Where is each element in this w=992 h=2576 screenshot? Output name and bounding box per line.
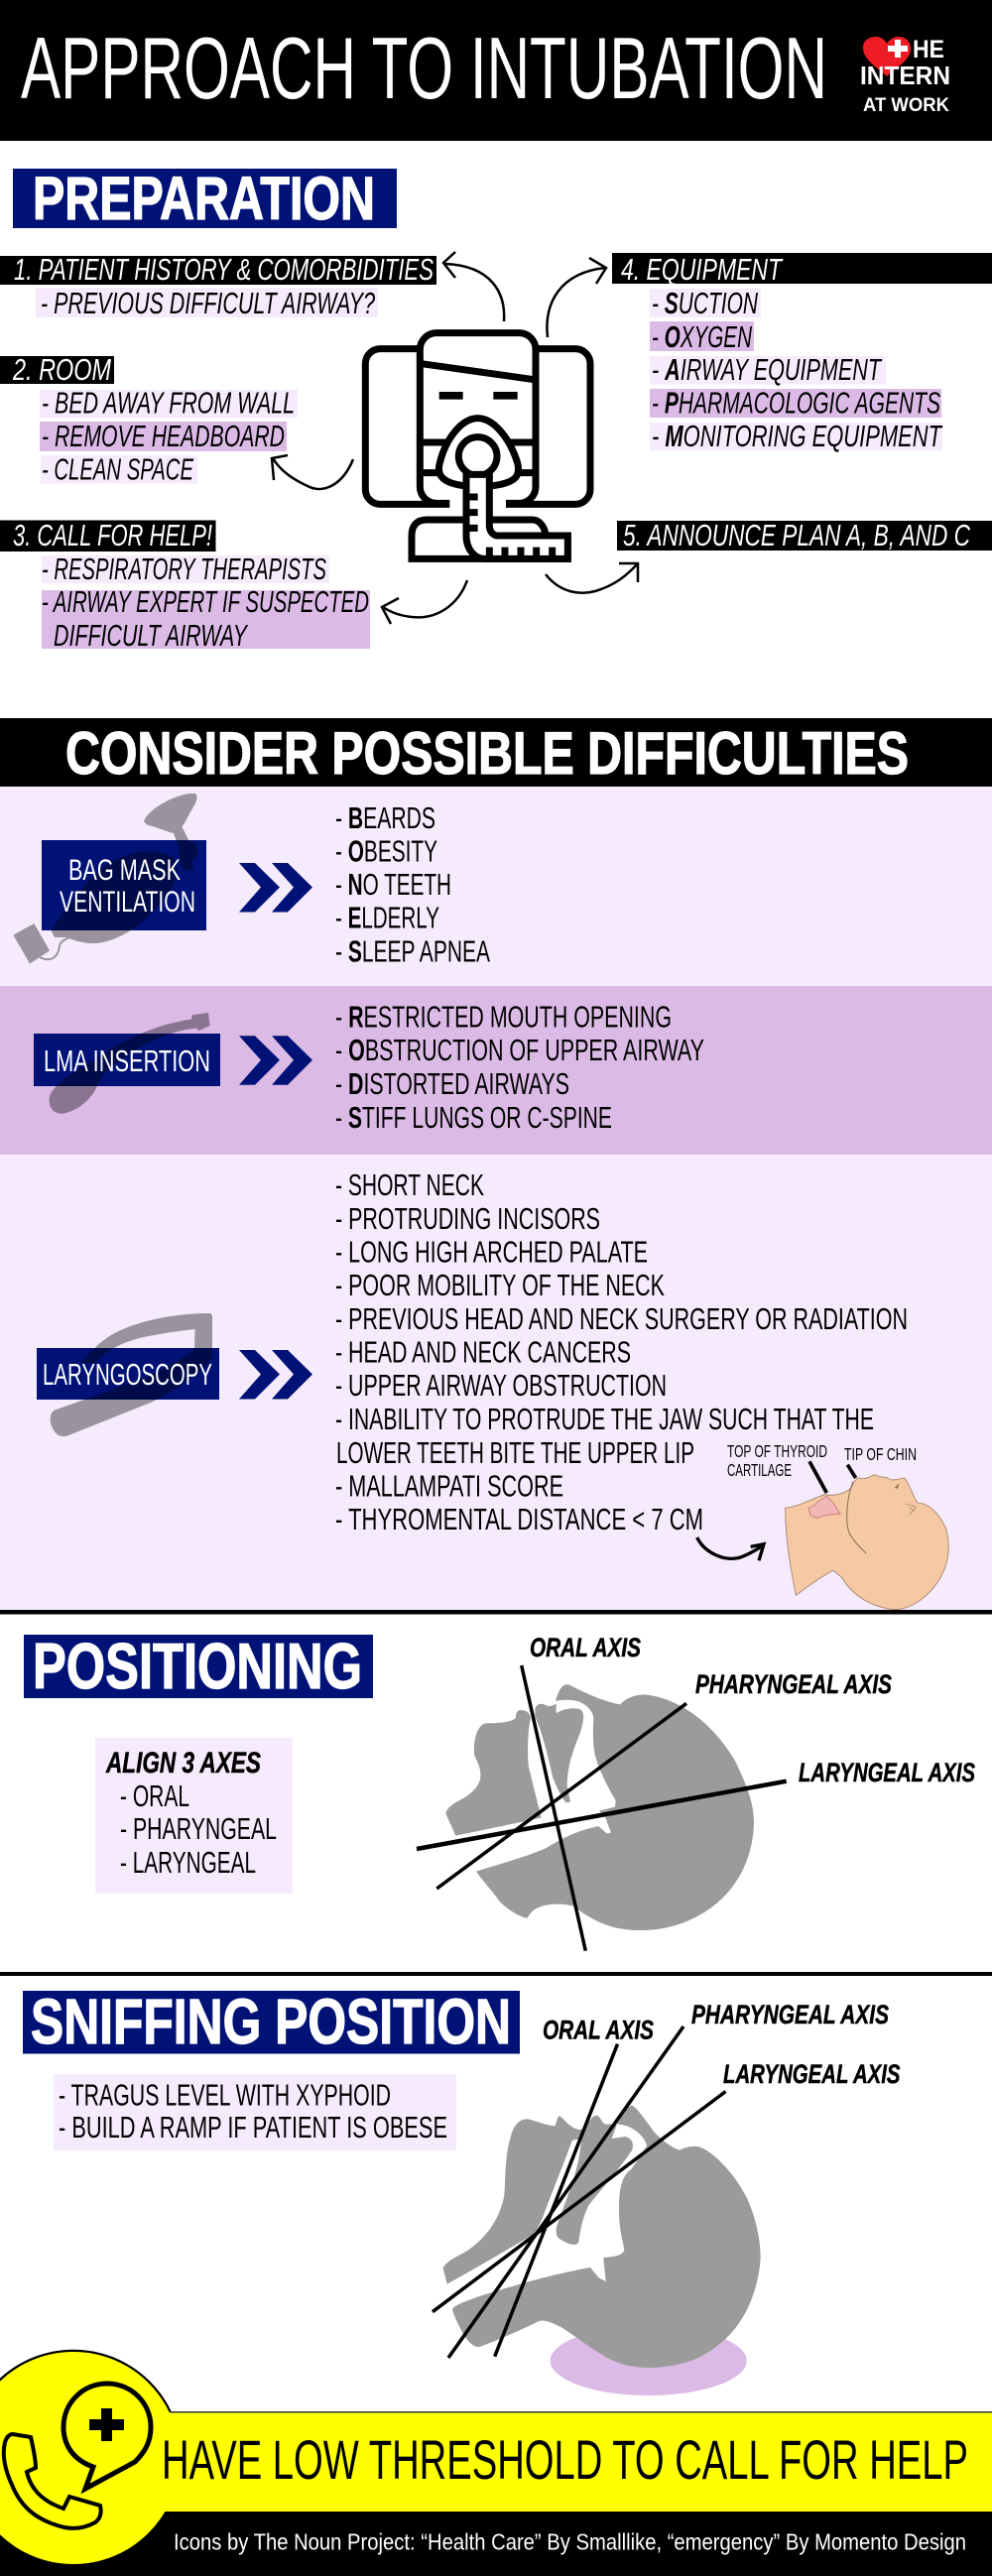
illustration: thyromental distance head xyxy=(697,1461,948,1610)
label: bag mask ventilation: VENTILATION xyxy=(60,886,195,919)
list: laryngoscopy difficulties: - THYROMENTAL DISTANCE < 7 CM xyxy=(335,1502,703,1536)
text block: sniffing position tips: - TRAGUS LEVEL WITH XYPHOID xyxy=(59,2077,391,2113)
list: laryngoscopy difficulties: - SHORT NECK xyxy=(335,1167,484,1202)
icon: laryngoscope xyxy=(51,1313,212,1436)
label: laryngoscopy: LARYNGOSCOPY xyxy=(43,1357,212,1392)
text block: align 3 axes xyxy=(95,1738,293,1894)
list: laryngoscopy difficulties: - POOR MOBILITY OF THE NECK xyxy=(335,1268,665,1302)
diagram: neutral head with axes xyxy=(417,1633,975,1951)
divider xyxy=(0,1610,992,1615)
step 4: equipment xyxy=(612,252,992,453)
panel: LMA insertion xyxy=(0,986,992,1155)
list: laryngoscopy difficulties: - LONG HIGH ARCHED PALATE xyxy=(335,1234,648,1270)
labels: thyromental landmarks: TIP OF CHIN xyxy=(844,1444,917,1464)
icon: patient with oxygen mask xyxy=(365,333,590,558)
step 1: patient history xyxy=(0,252,436,320)
heading: positioning: POSITIONING xyxy=(33,1630,362,1702)
list: laryngoscopy difficulties: - PROTRUDING INCISORS xyxy=(335,1201,600,1236)
labels: thyromental landmarks xyxy=(727,1441,917,1480)
arrow: to step 1 xyxy=(443,252,504,321)
step 3: call for help: 3. CALL FOR HELP! xyxy=(13,518,212,552)
step 2: room: - BED AWAY FROM WALL xyxy=(42,385,295,421)
step 1: patient history: 1. PATIENT HISTORY & COMORBIDITIES xyxy=(14,252,434,287)
list: laryngoscopy difficulties xyxy=(335,1167,908,1536)
divider xyxy=(0,1972,992,1976)
text block: align 3 axes: ALIGN 3 AXES xyxy=(105,1747,261,1779)
axis labels xyxy=(543,2000,901,2089)
heading: preparation: PREPARATION xyxy=(33,165,375,232)
step 3: call for help: - RESPIRATORY THERAPISTS xyxy=(42,552,326,586)
list: ROD S: - OBSTRUCTION OF UPPER AIRWAY xyxy=(335,1033,704,1067)
text block: align 3 axes: - ORAL xyxy=(120,1779,189,1813)
list: ROD S: - RESTRICTED MOUTH OPENING xyxy=(335,1000,672,1035)
axis labels: PHARYNGEAL AXIS xyxy=(691,2000,889,2029)
axis labels xyxy=(530,1633,975,1787)
axis labels: ORAL AXIS xyxy=(530,1633,641,1662)
head ramp and silhouette xyxy=(443,2106,761,2395)
list: BONES: - ELDERLY xyxy=(335,901,439,934)
text block: align 3 axes: - LARYNGEAL xyxy=(120,1845,256,1880)
label: LMA insertion: LMA INSERTION xyxy=(44,1043,210,1078)
labels: thyromental landmarks: TOP OF THYROID xyxy=(727,1441,827,1461)
step 4: equipment: 4. EQUIPMENT xyxy=(621,252,784,287)
axis labels: ORAL AXIS xyxy=(543,2016,654,2045)
axis lines xyxy=(417,1665,787,1951)
axis labels: PHARYNGEAL AXIS xyxy=(695,1669,892,1699)
diagram: sniffing head with axes xyxy=(433,2000,901,2395)
list: BONES: - BEARDS xyxy=(335,800,435,835)
logo: The Intern at Work: HE xyxy=(913,36,944,63)
icon: speech bubble with plus xyxy=(63,2384,151,2489)
step 4: equipment: - AIRWAY EQUIPMENT xyxy=(652,352,882,387)
list: ROD S: - DISTORTED AIRWAYS xyxy=(335,1066,569,1101)
heading: sniffing position: SNIFFING POSITION xyxy=(31,1986,511,2057)
label: bag mask ventilation xyxy=(60,854,195,919)
panel: laryngoscopy xyxy=(0,1155,992,1610)
step 4: equipment: - OXYGEN xyxy=(652,319,752,354)
icon: double chevron xyxy=(239,1036,312,1085)
list: BONES: - SLEEP APNEA xyxy=(335,933,490,968)
icon: telephone handset xyxy=(4,2434,101,2528)
text block: sniffing position tips: - BUILD A RAMP IF PATIENT IS OBESE xyxy=(59,2110,447,2145)
list: laryngoscopy difficulties: LOWER TEETH BITE THE UPPER LIP xyxy=(336,1435,694,1470)
arrow: to step 4 xyxy=(547,258,606,337)
arrow: to step 2 xyxy=(272,455,353,489)
axis labels: LARYNGEAL AXIS xyxy=(723,2059,901,2089)
icon: laryngeal mask airway xyxy=(50,1013,210,1114)
step 2: room: 2. ROOM xyxy=(12,352,111,387)
step 2: room: - REMOVE HEADBOARD xyxy=(42,419,285,453)
footer callout xyxy=(0,2351,992,2576)
list: BONES xyxy=(335,800,490,968)
labels: thyromental landmarks: CARTILAGE xyxy=(727,1460,792,1480)
list: ROD S: - STIFF LUNGS OR C-SPINE xyxy=(335,1100,612,1135)
logo: The Intern at Work: INTERN xyxy=(860,61,950,90)
list: laryngoscopy difficulties: - HEAD AND NECK CANCERS xyxy=(335,1335,631,1369)
step 1: patient history: - PREVIOUS DIFFICULT AIRWAY? xyxy=(41,286,376,320)
icon: double chevron xyxy=(239,863,312,913)
head silhouette xyxy=(445,1684,754,1930)
axis lines xyxy=(433,2026,726,2358)
list: laryngoscopy difficulties: - MALLAMPATI SCORE xyxy=(335,1468,563,1504)
step 4: equipment: - SUCTION xyxy=(652,286,758,320)
header banner xyxy=(0,0,992,141)
panel: bag mask ventilation xyxy=(0,787,992,986)
text block: align 3 axes: - PHARYNGEAL xyxy=(120,1811,277,1846)
arrow: to step 5 xyxy=(546,563,638,593)
step 2: room xyxy=(0,352,298,486)
text block: sniffing position tips xyxy=(54,2074,456,2150)
icon: bag valve mask xyxy=(13,794,198,964)
logo: The Intern at Work xyxy=(860,36,950,116)
label: bag mask ventilation: BAG MASK xyxy=(68,854,181,887)
list: laryngoscopy difficulties: - UPPER AIRWAY OBSTRUCTION xyxy=(335,1368,667,1403)
list: ROD S xyxy=(335,1000,704,1135)
step 3: call for help: - AIRWAY EXPERT IF SUSPECTED xyxy=(42,584,369,619)
logo: The Intern at Work: AT WORK xyxy=(863,95,949,116)
icon: double chevron xyxy=(239,1350,312,1399)
list: BONES: - OBESITY xyxy=(335,833,437,869)
step 2: room: - CLEAN SPACE xyxy=(42,452,193,486)
step 3: call for help: DIFFICULT AIRWAY xyxy=(54,618,249,653)
step 3: call for help xyxy=(0,518,370,653)
arrow: to step 3 xyxy=(382,580,467,624)
list: BONES: - NO TEETH xyxy=(335,867,451,902)
